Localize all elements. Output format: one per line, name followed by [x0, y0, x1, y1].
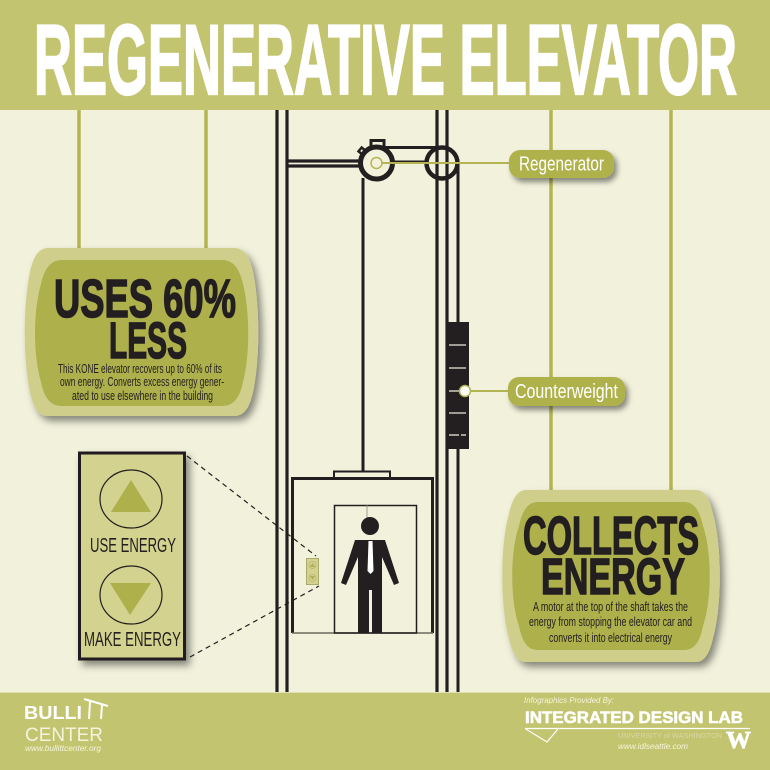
logo: integrated design lab: www.idlseattle.com [618, 741, 688, 751]
body text: uses 60% less: own energy. Converts excess energy gener- [60, 375, 224, 389]
body text: collects energy: converts it into electrical energy [549, 631, 673, 645]
call button panel in car [306, 558, 318, 584]
label: counterweight [508, 377, 625, 406]
body text: collects energy: A motor at the top of the shaft takes the [533, 600, 688, 614]
heading: collects energy: ENERGY [541, 548, 685, 605]
label: regenerator [509, 150, 614, 178]
body text: collects energy: energy from stopping the elevator car and [529, 615, 692, 629]
logo: bullitt center [24, 699, 108, 753]
logo: integrated design lab [524, 695, 751, 754]
elevator car [292, 472, 433, 633]
heading: uses 60% less: USES 60% [54, 269, 236, 329]
icon: up button [100, 470, 162, 528]
regenerator leader line [382, 162, 512, 164]
icon: down button [100, 566, 162, 624]
logo: integrated design lab: UNIVERSITY of WASHINGTON [618, 731, 722, 740]
body text: uses 60% less: ated to use elsewhere in the building [72, 389, 213, 403]
panel: uses 60% less [25, 248, 258, 416]
hanging straps [79, 110, 671, 492]
regenerator pulley assembly [358, 140, 458, 693]
body text: uses 60% less: This KONE elevator recovers up to 60% of its [58, 362, 222, 376]
label: make energy: MAKE ENERGY [84, 629, 181, 651]
heading: uses 60% less: LESS [109, 312, 187, 369]
counterweight block [447, 322, 469, 449]
label: regenerator: Regenerator [519, 154, 604, 176]
heading: uses 60% less [54, 269, 236, 369]
elevator door [334, 506, 416, 633]
icon: person in suit [341, 505, 399, 633]
heading: collects energy [523, 506, 699, 605]
label: counterweight: Counterweight [515, 381, 618, 403]
panel: collects energy [502, 490, 720, 662]
logo: integrated design lab: W [726, 728, 751, 754]
elevator shaft rails [277, 110, 447, 693]
counterweight leader line and marker [460, 386, 510, 396]
logo: integrated design lab: Infographics Provided By: [524, 695, 615, 705]
body text: uses 60% less [58, 362, 224, 403]
label: use energy: USE ENERGY [90, 535, 176, 557]
logo: bullitt center: www.bullittcenter.org [25, 744, 102, 753]
zoom dashed lines [187, 456, 319, 657]
logo: bullitt center: CENTER [25, 725, 103, 746]
panel: enlarged call buttons [80, 453, 184, 659]
logo: bullitt center: BULLI [24, 703, 82, 723]
logo: integrated design lab: INTEGRATED DESIGN LAB [525, 709, 743, 727]
header band [0, 0, 770, 115]
body text: collects energy [529, 600, 692, 645]
footer band [0, 692, 770, 770]
